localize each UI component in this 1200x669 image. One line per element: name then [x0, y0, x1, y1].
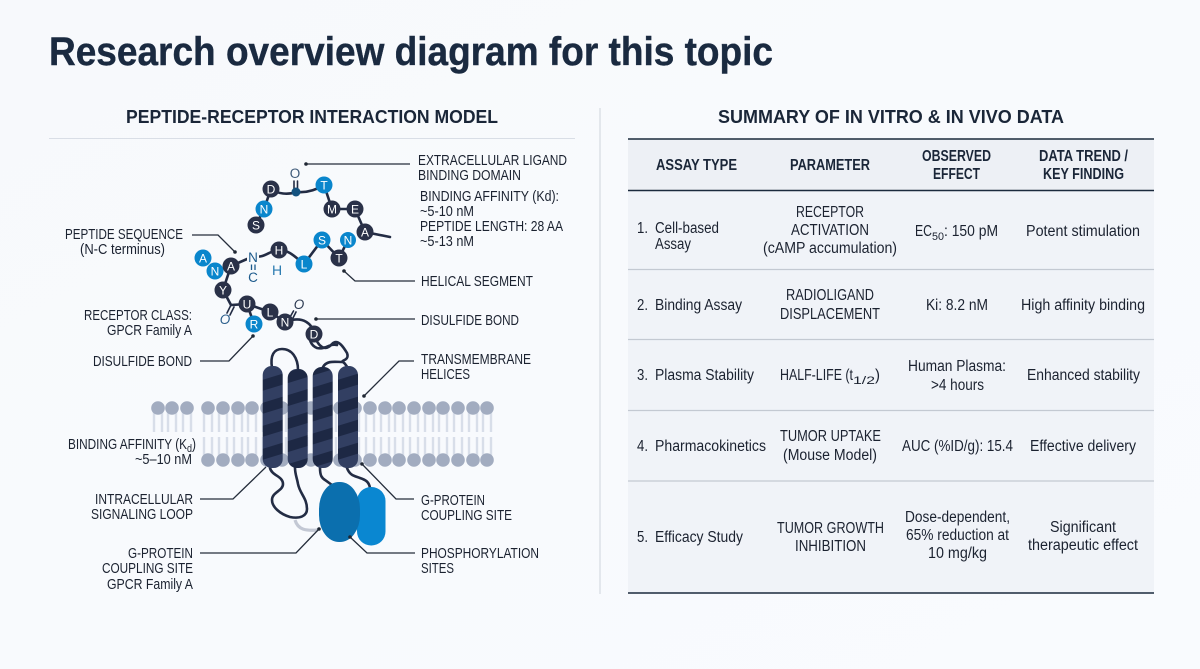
table row 1: cell-based assay: ACTIVATION: [791, 222, 869, 239]
peptide residues: H: [272, 262, 282, 278]
label: phosphorylation sites: SITES: [421, 560, 454, 577]
table header row: EFFECT: [933, 166, 980, 183]
label: extracellular ligand binding domain: BINDING DOMAIN: [418, 167, 521, 184]
label: intracellular signaling loop: INTRACELLULAR: [95, 491, 193, 508]
table row 4: pharmacokinetics: Pharmacokinetics: [655, 438, 766, 455]
label: transmembrane helices: HELICES: [421, 366, 470, 383]
peptide residues: S: [318, 234, 326, 248]
table row 4: pharmacokinetics: AUC (%ID/g): 15.4: [902, 438, 1013, 455]
label: g-protein coupling site left: [102, 545, 193, 593]
table row 2: binding assay: 2.: [637, 297, 648, 314]
table row 3: plasma stability: Enhanced stability: [1027, 367, 1140, 384]
peptide backbone chain: [223, 181, 390, 368]
table row 1: cell-based assay: Cell-based: [655, 220, 719, 237]
peptide residues: N: [211, 264, 219, 278]
peptide residues: A: [227, 260, 235, 274]
table row 5: efficacy study: 65% reduction at: [906, 527, 1010, 544]
table header row: OBSERVED: [922, 148, 991, 165]
label: disulfide bond left: DISULFIDE BOND: [93, 353, 192, 370]
label: g-protein coupling site right: G-PROTEIN: [421, 492, 485, 509]
peptide residues: N: [260, 202, 268, 216]
label: binding affinity left: [68, 436, 196, 468]
label: binding affinity left: d: [187, 443, 192, 455]
table row 3: plasma stability: ): [875, 367, 880, 384]
label: helical segment: HELICAL SEGMENT: [421, 273, 533, 290]
label: intracellular signaling loop: [91, 491, 193, 523]
label: intracellular signaling loop: SIGNALING LOOP: [91, 506, 193, 523]
transmembrane helices: [263, 366, 358, 468]
table row 2: binding assay: RADIOLIGAND: [786, 287, 874, 304]
label: binding affinity left: ~5–10 nM: [135, 451, 192, 468]
peptide residues: D: [310, 328, 319, 342]
table row 5: efficacy study: Efficacy Study: [655, 529, 743, 546]
peptide residues: N: [248, 250, 258, 265]
peptide residues: R: [250, 318, 259, 332]
G-protein subunits: [319, 482, 386, 546]
label: receptor class: GPCR Family A: [107, 322, 192, 339]
table row 3: plasma stability: 3.: [637, 367, 648, 384]
label: receptor class: [84, 307, 192, 339]
peptide residues: U: [243, 298, 251, 312]
label: binding affinity left: BINDING AFFINITY (K: [68, 436, 187, 453]
peptide residues: O: [290, 166, 300, 181]
label: binding affinity and peptide length: ~5-13 nM: [420, 233, 474, 250]
label: transmembrane helices: TRANSMEMBRANE: [421, 351, 531, 368]
table row 1: cell-based assay: [637, 204, 1140, 257]
peptide residues: L: [267, 306, 274, 320]
table row 4: pharmacokinetics: 4.: [637, 438, 648, 455]
label: peptide sequence: PEPTIDE SEQUENCE: [65, 226, 183, 243]
peptide residues: O: [294, 297, 305, 312]
table row 4: pharmacokinetics: (Mouse Model): [783, 447, 877, 464]
table row 2: binding assay: Binding Assay: [655, 297, 742, 314]
peptide residues: H: [275, 244, 283, 258]
label: extracellular ligand binding domain: EXTRACELLULAR LIGAND: [418, 152, 567, 169]
table row 2: binding assay: [637, 287, 1145, 323]
table row 1: cell-based assay: (cAMP accumulation): [763, 240, 897, 257]
table row 5: efficacy study: [637, 509, 1139, 562]
panel: summary data table: [628, 106, 1154, 593]
lipid bilayer: [151, 401, 494, 467]
table row 5: efficacy study: Dose-dependent,: [905, 509, 1010, 526]
peptide residues: L: [301, 258, 308, 272]
label: phosphorylation sites: PHOSPHORYLATION: [421, 545, 539, 562]
label: phosphorylation sites: [421, 545, 539, 577]
table header row: KEY FINDING: [1043, 166, 1124, 183]
table header row: [656, 148, 1129, 183]
table row 5: efficacy study: 10 mg/kg: [928, 545, 987, 562]
peptide residues: M: [327, 202, 337, 216]
label: peptide sequence: (N-C terminus): [80, 241, 165, 258]
table row 4: pharmacokinetics: TUMOR UPTAKE: [780, 428, 881, 445]
table row 5: efficacy study: therapeutic effect: [1028, 537, 1139, 554]
label: g-protein coupling site left: GPCR Family A: [107, 576, 193, 593]
table row 1: cell-based assay: 50: [932, 231, 944, 243]
table row 1: cell-based assay: : 150 pM: [944, 223, 998, 240]
label: g-protein coupling site left: COUPLING SITE: [102, 560, 193, 577]
table row 2: binding assay: DISPLACEMENT: [780, 306, 880, 323]
title: Research overview diagram for this topic: [49, 30, 773, 74]
peptide residues: A: [199, 252, 207, 266]
label: receptor class: RECEPTOR CLASS:: [84, 307, 192, 324]
label: extracellular ligand binding domain: [418, 152, 567, 184]
label: binding affinity and peptide length: BINDING AFFINITY (Kd):: [420, 188, 559, 205]
table row 3: plasma stability: >4 hours: [931, 377, 984, 394]
peptide residues: N: [344, 234, 352, 248]
table row 1: cell-based assay: EC: [915, 223, 932, 240]
peptide residues: T: [320, 178, 328, 192]
label: binding affinity left: ): [192, 436, 196, 453]
table row 5: efficacy study: Significant: [1050, 519, 1117, 536]
label: transmembrane helices: [421, 351, 531, 383]
peptide residues: T: [335, 252, 343, 266]
leader lines: [192, 162, 415, 553]
peptide residues: S: [252, 218, 260, 232]
heading: right panel: SUMMARY OF IN VITRO & IN VIVO DATA: [718, 106, 1064, 127]
table row 3: plasma stability: [637, 358, 1140, 394]
peptide residues: O: [220, 312, 231, 327]
table row 4: pharmacokinetics: [637, 428, 1136, 464]
table row 5: efficacy study: INHIBITION: [795, 538, 866, 555]
peptide residues: C: [248, 270, 258, 285]
peptide residues: N: [281, 316, 289, 330]
table row 2: binding assay: Ki: 8.2 nM: [926, 297, 988, 314]
table row 3: plasma stability: Human Plasma:: [908, 358, 1006, 375]
table row 3: plasma stability: Plasma Stability: [655, 367, 754, 384]
table row 3: plasma stability: 1/2: [853, 375, 875, 387]
peptide residues: A: [361, 226, 369, 240]
label: g-protein coupling site right: [421, 492, 512, 524]
peptide residues: Y: [219, 284, 227, 298]
table row 2: binding assay: High affinity binding: [1021, 297, 1145, 314]
label: binding affinity and peptide length: ~5-10 nM: [420, 203, 474, 220]
table row 5: efficacy study: TUMOR GROWTH: [777, 520, 884, 537]
panel: peptide-receptor interaction model: [49, 106, 575, 593]
label: g-protein coupling site left: G-PROTEIN: [128, 545, 193, 562]
label: g-protein coupling site right: COUPLING SITE: [421, 507, 512, 524]
table row 5: efficacy study: 5.: [637, 529, 648, 546]
table row 4: pharmacokinetics: Effective delivery: [1030, 438, 1136, 455]
peptide residues: E: [351, 202, 359, 216]
peptide residues: [194, 166, 374, 342]
heading: left panel: PEPTIDE-RECEPTOR INTERACTION MODEL: [126, 106, 498, 127]
label: binding affinity and peptide length: PEPTIDE LENGTH: 28 AA: [420, 218, 563, 235]
label: binding affinity and peptide length: [420, 188, 563, 250]
receptor loops: [270, 349, 370, 530]
table row 3: plasma stability: HALF-LIFE (t: [780, 367, 854, 384]
table background and rules: [628, 139, 1154, 593]
table row 1: cell-based assay: RECEPTOR: [796, 204, 864, 221]
table header row: DATA TREND /: [1039, 148, 1129, 165]
table header row: PARAMETER: [790, 157, 870, 174]
table row 1: cell-based assay: 1.: [637, 220, 648, 237]
label: peptide sequence: [65, 226, 183, 258]
peptide residues: D: [267, 182, 276, 196]
table header row: ASSAY TYPE: [656, 157, 737, 174]
label: disulfide bond right: DISULFIDE BOND: [421, 312, 519, 329]
table row 1: cell-based assay: Assay: [655, 236, 691, 253]
table row 1: cell-based assay: Potent stimulation: [1026, 223, 1140, 240]
